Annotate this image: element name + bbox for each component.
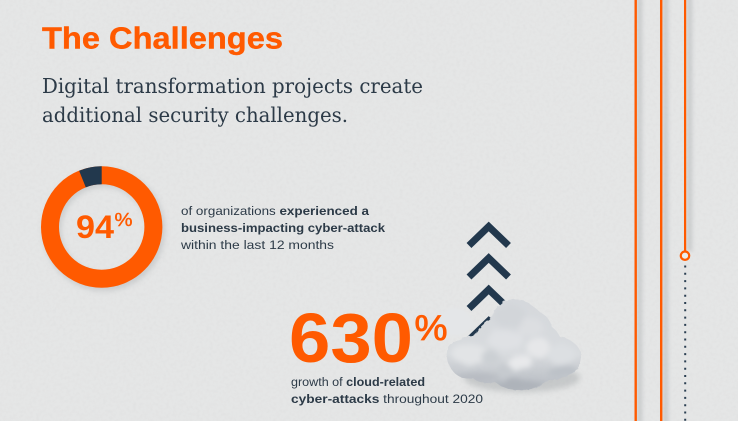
icon: small faint cloud behind number — [428, 308, 472, 339]
timeline: orange line, node and dotted continuation — [681, 0, 689, 421]
title: The Challenges — [42, 20, 283, 56]
stat text: 94 percent: of organizations experienced a — [181, 204, 369, 218]
icon: upward chevrons — [469, 226, 508, 340]
icon: cloud — [447, 299, 581, 392]
stat number: 630 percent: 630 — [289, 299, 413, 377]
stat text: 94 percent: within the last 12 months — [180, 238, 334, 252]
vertical orange line middle — [660, 0, 662, 421]
stat text: 94 percent — [180, 204, 385, 252]
vertical orange line left — [634, 0, 637, 421]
subtitle — [42, 74, 423, 127]
vertical line shadows — [637, 0, 692, 421]
donut chart: 94% — [50, 166, 156, 282]
stat text: 630 percent: cyber-attacks throughout 2020 — [291, 392, 483, 406]
subtitle: Digital transformation projects create — [42, 74, 423, 98]
donut value: 94 — [76, 209, 114, 245]
stat text: 630 percent — [291, 375, 483, 406]
stat number: 630 percent: % — [414, 309, 448, 348]
donut percent sign: % — [114, 210, 132, 230]
subtitle: additional security challenges. — [42, 103, 348, 127]
stat text: 630 percent: growth of cloud-related — [291, 375, 425, 389]
stat text: 94 percent: business-impacting cyber-attack — [181, 221, 385, 235]
